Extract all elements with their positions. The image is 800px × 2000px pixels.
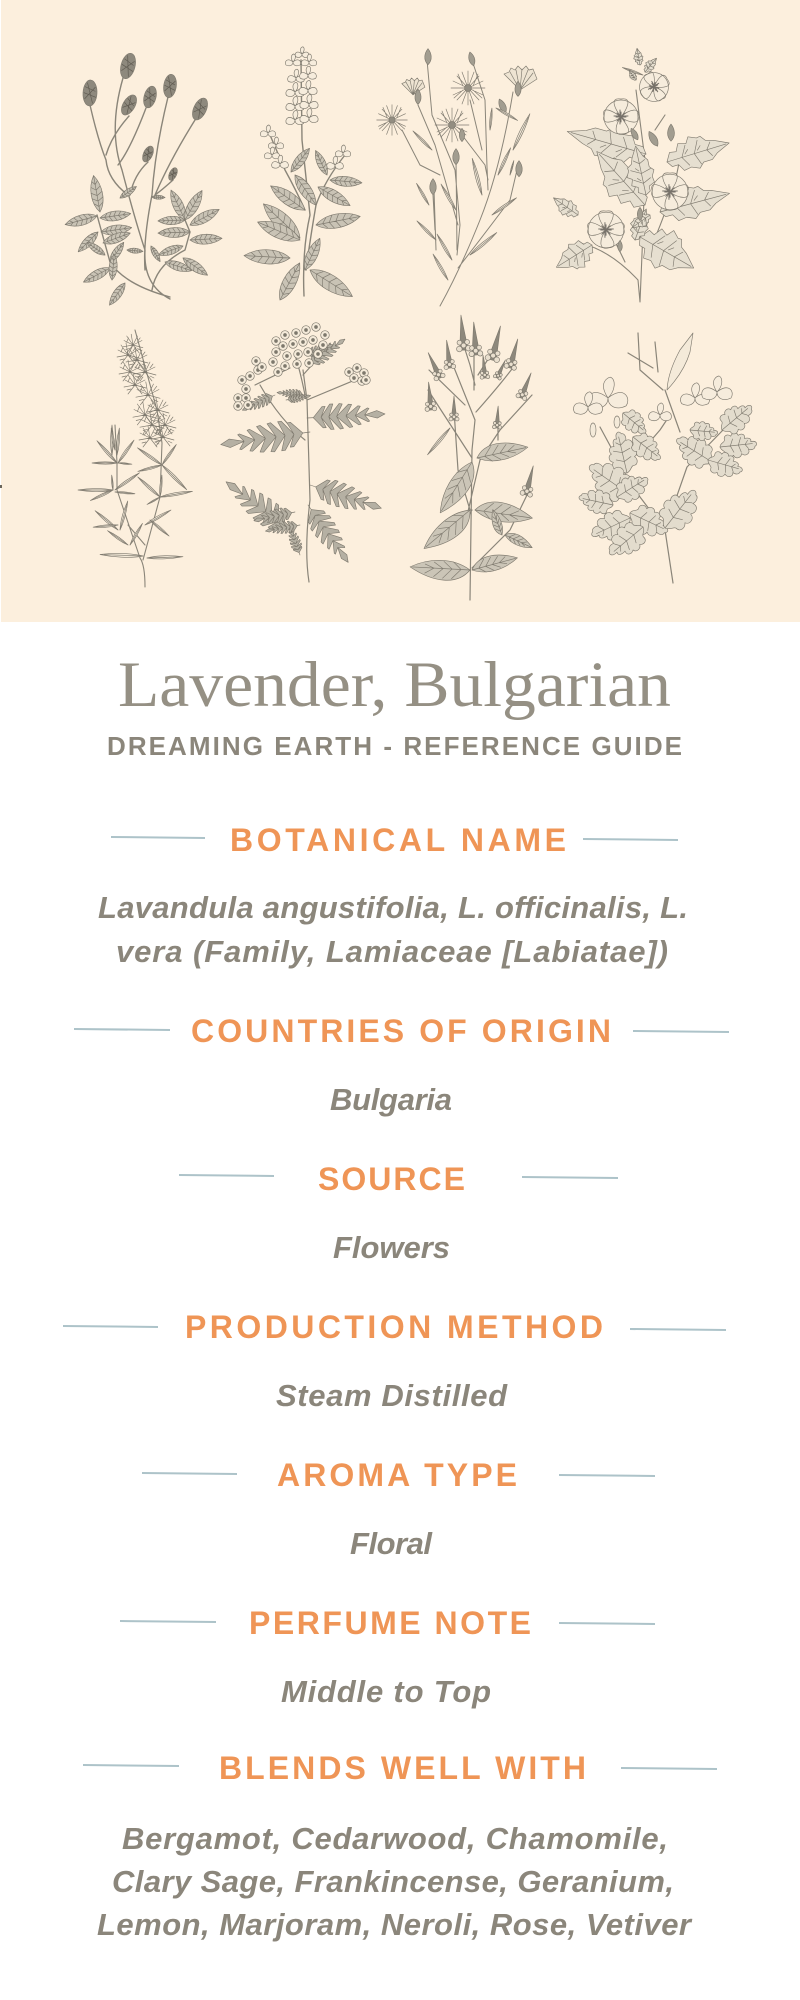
title: Lavender, Bulgarian (118, 649, 671, 721)
section: aroma type (142, 1457, 655, 1561)
plant: hyssop (78, 330, 193, 587)
plant: cornflower (377, 49, 537, 306)
section: blends well with (83, 1750, 717, 1942)
section: countries of origin (74, 1013, 729, 1117)
subtitle: DREAMING EARTH - REFERENCE GUIDE (107, 731, 682, 761)
heading: PRODUCTION METHOD (185, 1309, 603, 1345)
body text: Bulgaria (330, 1082, 452, 1117)
heading: SOURCE (318, 1161, 465, 1197)
plant: sage (244, 47, 362, 303)
plant: verbena (409, 314, 539, 600)
heading: AROMA TYPE (277, 1457, 517, 1493)
section: perfume note (120, 1605, 655, 1709)
plant: greater celandine (574, 333, 759, 583)
body text: Lemon, Marjoram, Neroli, Rose, Vetiver (97, 1907, 693, 1942)
heading: COUNTRIES OF ORIGIN (191, 1013, 611, 1049)
body text: Flowers (333, 1230, 450, 1265)
plant: mallow (548, 47, 734, 302)
body text: Clary Sage, Frankincense, Geranium, (112, 1864, 674, 1899)
section: botanical name (98, 822, 688, 969)
edge mark (0, 485, 2, 488)
panel: botanical illustrations (0, 0, 800, 622)
body text: Steam Distilled (276, 1378, 508, 1413)
body text: Bergamot, Cedarwood, Chamomile, (122, 1821, 668, 1856)
heading: BLENDS WELL WITH (219, 1750, 586, 1786)
body text: vera (Family, Lamiaceae [Labiatae]) (116, 934, 668, 969)
plant: tansy (218, 323, 386, 582)
body text: Lavandula angustifolia, L. officinalis, L. (98, 890, 688, 925)
body text: Floral (350, 1526, 433, 1561)
body text: Middle to Top (281, 1674, 491, 1709)
heading: BOTANICAL NAME (230, 822, 566, 858)
section: source (179, 1161, 618, 1265)
section: production method (63, 1309, 726, 1413)
heading: PERFUME NOTE (249, 1605, 531, 1641)
plant: burnet with oval flower heads (64, 52, 222, 307)
